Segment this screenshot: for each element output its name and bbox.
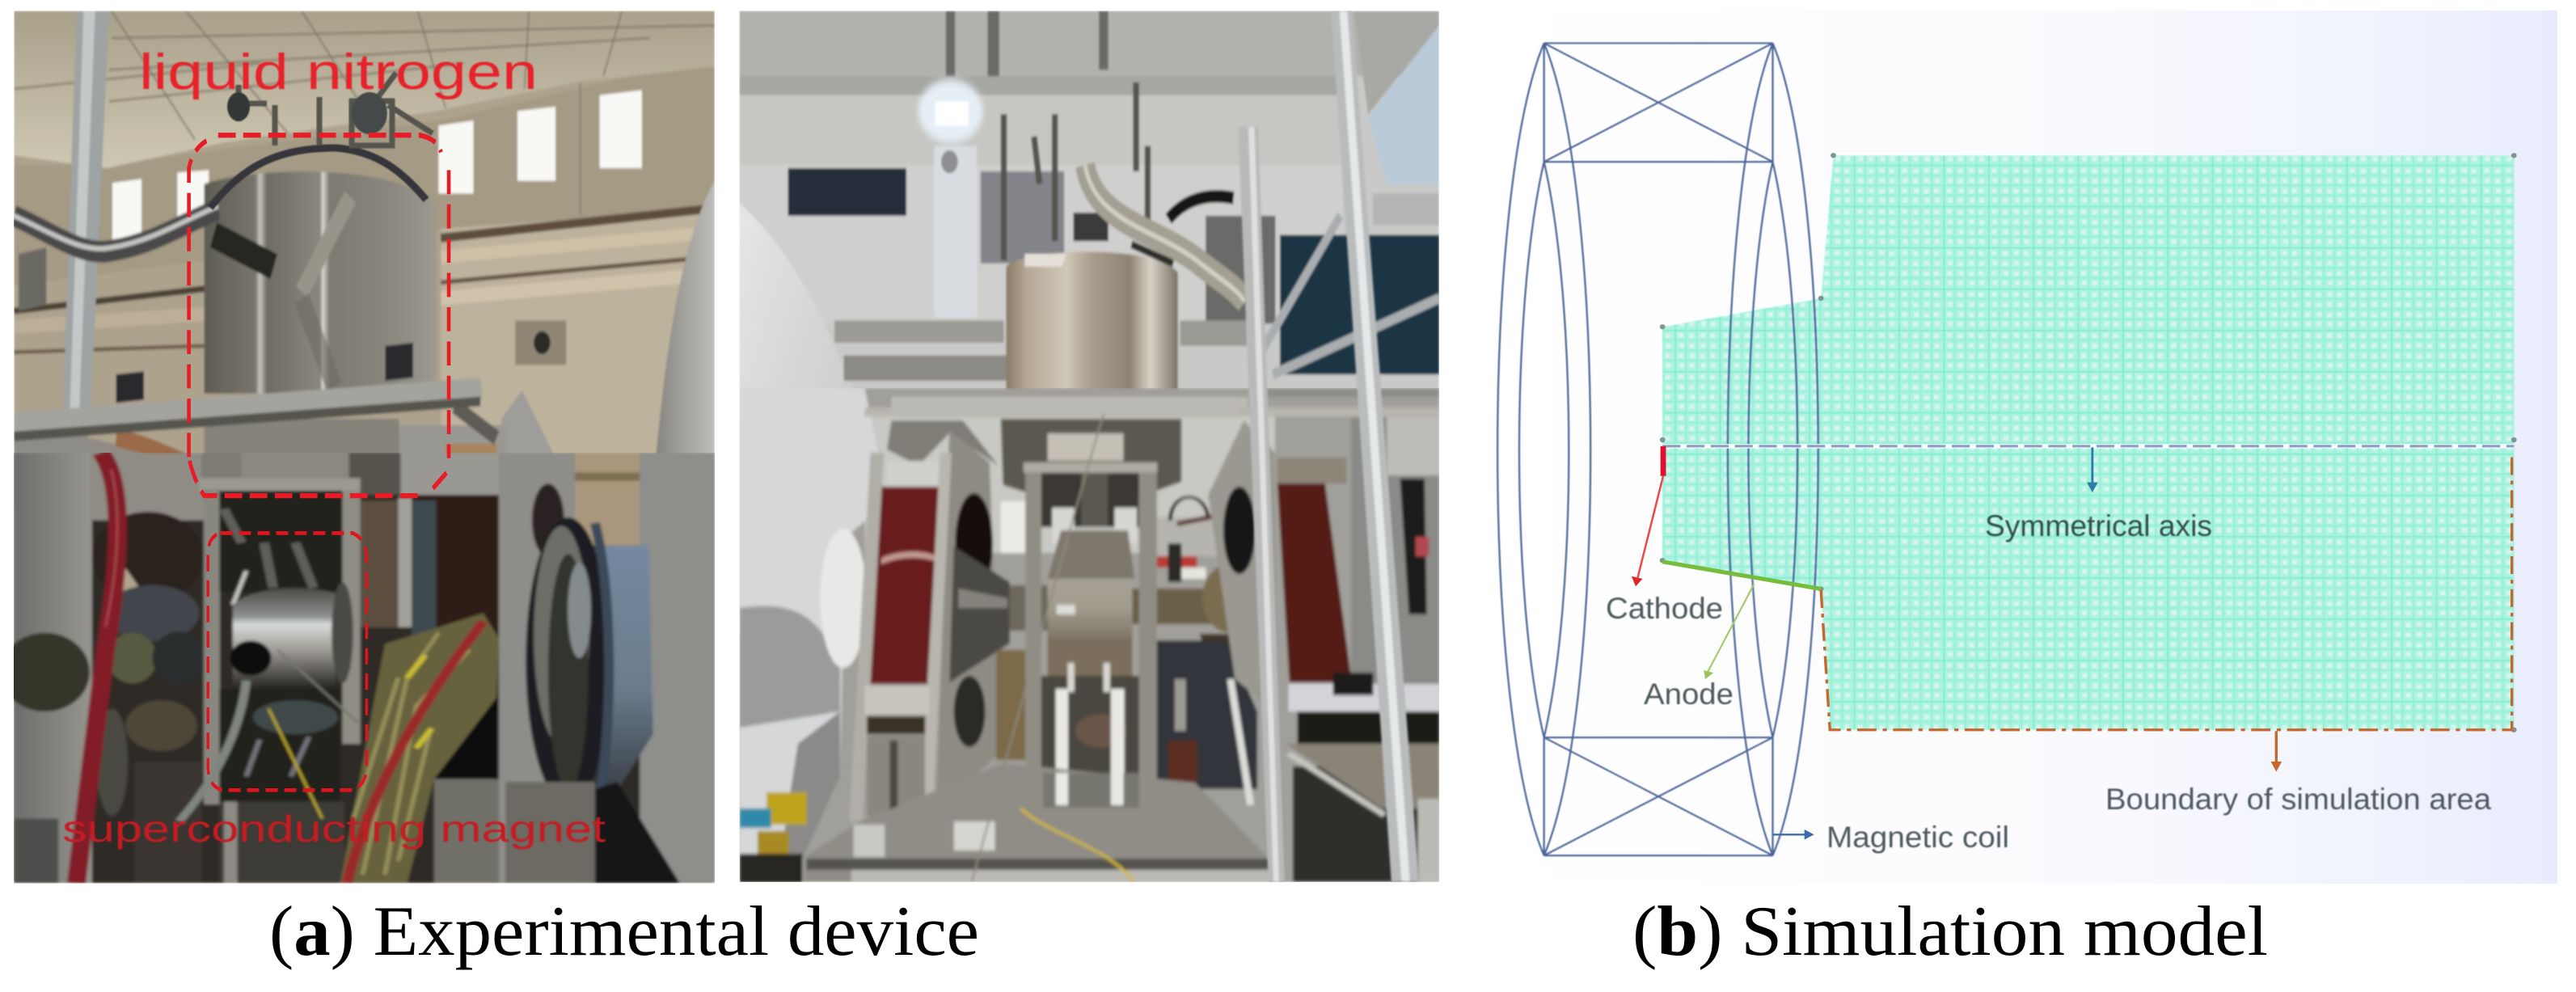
right coil <box>1208 420 1352 711</box>
symmetrical axis <box>1662 443 2514 449</box>
simulation mesh <box>1662 155 2514 730</box>
model background <box>1496 11 2557 884</box>
platform <box>1286 744 1439 882</box>
beams behind <box>361 500 400 627</box>
main vessel <box>1006 252 1178 397</box>
right plate top <box>500 391 553 454</box>
wire across frame <box>972 407 1105 882</box>
wedge plate left <box>936 430 999 812</box>
base plate <box>804 763 1271 882</box>
support beam <box>14 343 483 441</box>
side ports <box>1010 564 1257 686</box>
right equipment <box>1289 417 1439 744</box>
caption: experimental device: (a) Experimental device <box>269 893 979 971</box>
magnet frame <box>199 453 361 883</box>
caption: simulation model: (b) Simulation model <box>1632 893 2268 971</box>
mesh corner points <box>1660 153 2517 732</box>
label: liquid nitrogen: liquid nitrogen <box>139 44 538 100</box>
hall behind device <box>740 388 1439 882</box>
red hose <box>76 453 117 883</box>
main beam <box>893 399 1238 414</box>
support beam <box>864 388 1439 416</box>
label: magnetic coil: Magnetic coil <box>1826 821 2009 854</box>
vessel bottom bowl <box>1001 419 1181 496</box>
flange rings <box>505 517 680 883</box>
front posts <box>893 11 1419 882</box>
anode line and arrow <box>1662 562 1821 679</box>
bracket left <box>887 420 999 466</box>
wall pipes <box>14 209 703 352</box>
dark base <box>89 493 642 883</box>
dark right of chamber <box>1157 640 1257 805</box>
boundary of simulation area <box>1821 452 2512 730</box>
yellow valve <box>740 792 807 883</box>
coil plate <box>499 453 575 883</box>
nitrogen vessel <box>202 170 437 454</box>
panel: second photo of experimental device <box>739 11 1439 883</box>
silver drum <box>233 588 336 689</box>
wall gap <box>575 453 648 546</box>
pillar <box>62 11 109 419</box>
lamp and sensor box <box>918 79 983 317</box>
windows <box>112 90 642 241</box>
panel: simulation model <box>1496 11 2557 884</box>
black hose <box>1168 196 1234 219</box>
label: boundary of simulation area: Boundary of simulation area <box>2105 783 2491 816</box>
label: symmetrical axis: Symmetrical axis <box>1985 509 2212 542</box>
cable to vessel <box>14 206 218 251</box>
chamber interior <box>219 491 342 605</box>
instrument side <box>1157 497 1224 582</box>
vessel top hose and fittings <box>210 73 433 208</box>
ceiling <box>14 11 715 168</box>
frame posts <box>1024 462 1157 812</box>
vessel fittings <box>1004 82 1173 264</box>
dark panels right <box>1259 11 1439 374</box>
under chamber <box>1041 663 1139 810</box>
dark lower interior <box>219 689 340 802</box>
left coil <box>855 453 946 821</box>
annotation: liquid nitrogen dashed box <box>189 135 449 496</box>
lower part of device photo <box>0 453 715 883</box>
braided hoses <box>1085 165 1245 302</box>
lower part of second photo <box>740 388 1439 883</box>
side beams <box>834 320 1248 346</box>
center interior <box>1041 472 1139 543</box>
label: anode: Anode <box>1644 678 1734 711</box>
gap left of post <box>996 650 1025 760</box>
vacuum chamber <box>1048 530 1134 676</box>
left housing <box>14 453 95 883</box>
black valve <box>230 640 272 676</box>
brown coil panel <box>412 495 505 883</box>
left white chamber <box>739 203 872 635</box>
panel: photo of experimental device with labels <box>0 11 715 883</box>
symmetrical axis arrow <box>2087 447 2098 492</box>
hall background <box>739 11 1439 882</box>
wall vent <box>515 320 566 365</box>
magnetic coil wireframe <box>1497 43 1818 855</box>
right dome <box>640 453 715 883</box>
cone <box>949 547 1010 682</box>
side valve <box>213 234 274 267</box>
wall background <box>14 11 715 882</box>
boundary arrow <box>2270 731 2282 772</box>
magnetic coil arrow <box>1773 829 1814 840</box>
label: superconducting magnet: superconducting magnet <box>62 808 606 850</box>
wire bundle <box>340 613 499 883</box>
label: cathode: Cathode <box>1606 592 1723 625</box>
cathode marker and arrow <box>1632 446 1663 586</box>
coil arch and hub <box>90 453 206 883</box>
yellow wire <box>1021 808 1134 883</box>
white tank <box>740 388 878 860</box>
grating and rear structure <box>981 171 1064 264</box>
annotation: superconducting magnet dashed box <box>208 533 366 790</box>
right dome <box>655 181 715 879</box>
left housing top <box>14 434 89 456</box>
plate behind vessel base <box>400 453 501 496</box>
